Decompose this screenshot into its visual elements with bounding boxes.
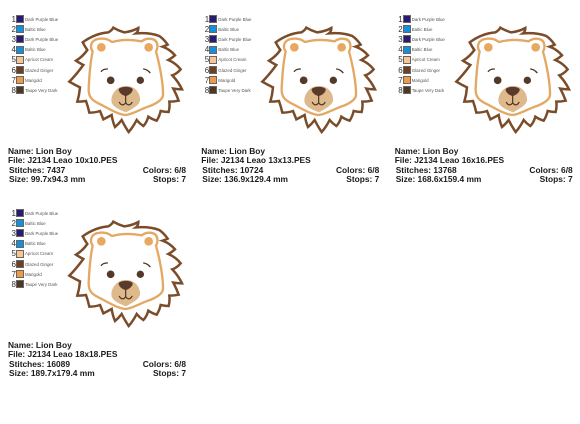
color legend: Taupe Very Dark	[218, 88, 251, 93]
color legend: 7	[12, 270, 16, 279]
color legend: Baltic Blue	[25, 241, 46, 246]
design details: Colors: 6/8	[336, 165, 379, 175]
color legend: Glazed Ginger	[412, 68, 440, 72]
color legend: 6	[398, 66, 403, 74]
color legend: 6	[12, 66, 16, 74]
color legend: 6	[12, 260, 16, 268]
color legend: Baltic Blue	[218, 27, 239, 32]
color legend: 1	[12, 208, 16, 218]
color legend: 8	[398, 86, 403, 95]
color legend: Apricot Cream	[25, 57, 53, 62]
color legend: Dark Purple Blue	[412, 37, 445, 42]
color legend: 4	[12, 239, 16, 248]
design details: Size: 189.7x179.4 mm	[9, 368, 95, 378]
design details: Colors: 6/8	[143, 165, 186, 175]
color legend: 5	[12, 249, 16, 258]
color legend: 2	[12, 25, 16, 34]
color legend: 3	[205, 35, 209, 44]
color legend: Glazed Ginger	[218, 68, 247, 72]
color legend: Dark Purple Blue	[218, 16, 252, 22]
design details: Stops: 7	[153, 368, 186, 378]
color legend: 7	[12, 76, 16, 85]
panel: Lion Boy 10x10	[8, 14, 186, 184]
color legend: 7	[398, 76, 403, 85]
color legend	[12, 14, 58, 95]
color legend: Dark Purple Blue	[218, 37, 252, 42]
lion illustration	[67, 220, 184, 328]
design details: Stops: 7	[540, 174, 573, 184]
color legend: 2	[398, 25, 403, 34]
color legend	[12, 208, 58, 289]
panel: Lion Boy 18x18	[8, 208, 186, 378]
color legend: 4	[205, 45, 209, 54]
color legend: Taupe Very Dark	[412, 88, 444, 93]
design details: File: J2134 Leao 18x18.PES	[8, 349, 117, 359]
color legend: Glazed Ginger	[25, 68, 53, 72]
design details: File: J2134 Leao 16x16.PES	[395, 155, 504, 165]
lion illustration	[260, 26, 377, 134]
color legend: Dark Purple Blue	[25, 231, 58, 236]
design details: Size: 136.9x129.4 mm	[202, 174, 288, 184]
design details: Name: Lion Boy	[8, 146, 72, 156]
design details: Name: Lion Boy	[395, 146, 458, 156]
color legend: Apricot Cream	[412, 57, 440, 62]
design details: Stitches: 10724	[202, 165, 263, 175]
lion illustration	[67, 26, 184, 134]
design details: Name: Lion Boy	[8, 340, 72, 350]
color legend: Apricot Cream	[218, 57, 246, 62]
panel: Lion Boy 13x13	[201, 14, 379, 184]
color legend: Baltic Blue	[25, 221, 46, 226]
color legend: 6	[205, 66, 209, 74]
color legend: 1	[205, 14, 209, 24]
color legend: 5	[12, 55, 16, 64]
panel: Lion Boy 16x16	[395, 14, 573, 184]
lion illustration	[454, 26, 571, 134]
color legend: 3	[398, 35, 403, 44]
color legend: Dark Purple Blue	[25, 16, 58, 22]
color legend: 2	[12, 219, 16, 228]
color legend	[398, 14, 445, 95]
color legend: 8	[12, 86, 16, 95]
design details: Stops: 7	[346, 174, 379, 184]
color legend: 3	[12, 35, 16, 44]
design details: Stitches: 13768	[396, 165, 457, 175]
color legend: Glazed Ginger	[25, 262, 53, 266]
color legend: Apricot Cream	[25, 251, 53, 256]
color legend: Dark Purple Blue	[25, 37, 58, 42]
color legend: Marigold	[218, 78, 235, 83]
color legend: 8	[12, 280, 16, 289]
color legend: 5	[205, 55, 209, 64]
design details: File: J2134 Leao 10x10.PES	[8, 155, 117, 165]
color legend: Marigold	[412, 78, 429, 83]
design details: Size: 168.6x159.4 mm	[396, 174, 481, 184]
color legend: 4	[398, 45, 403, 54]
color legend: Taupe Very Dark	[25, 88, 57, 93]
design details	[201, 146, 379, 184]
design details: Size: 99.7x94.3 mm	[9, 174, 85, 184]
color legend: 2	[205, 25, 209, 34]
color legend: Baltic Blue	[412, 27, 432, 32]
color legend: Baltic Blue	[412, 47, 432, 52]
color legend: 3	[12, 229, 16, 238]
design details	[8, 340, 186, 378]
design details: File: J2134 Leao 13x13.PES	[201, 155, 311, 165]
design details	[395, 146, 573, 184]
color legend: Dark Purple Blue	[25, 210, 58, 216]
color legend: 5	[398, 55, 403, 64]
color legend: Baltic Blue	[218, 47, 239, 52]
color legend: 1	[12, 14, 16, 24]
color legend: 7	[205, 76, 209, 85]
design details: Stops: 7	[153, 174, 186, 184]
color legend: Marigold	[25, 78, 42, 83]
color legend: Baltic Blue	[25, 27, 46, 32]
design details: Colors: 6/8	[143, 359, 186, 369]
color legend: Baltic Blue	[25, 47, 46, 52]
color legend: 1	[398, 14, 403, 24]
design details: Colors: 6/8	[529, 165, 573, 175]
design details: Name: Lion Boy	[201, 146, 265, 156]
color legend: 8	[205, 86, 209, 95]
color legend	[204, 14, 252, 95]
color legend: Taupe Very Dark	[25, 282, 57, 287]
color legend: 4	[12, 45, 16, 54]
design details: Stitches: 7437	[9, 165, 65, 175]
color legend: Dark Purple Blue	[412, 16, 445, 22]
color legend: Marigold	[25, 272, 42, 277]
design details: Stitches: 16089	[9, 359, 70, 369]
design details	[8, 146, 186, 184]
